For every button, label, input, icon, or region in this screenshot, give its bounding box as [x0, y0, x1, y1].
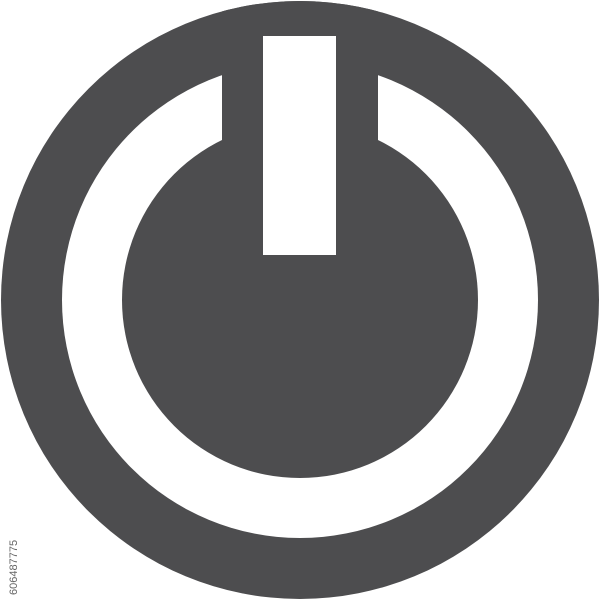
white ring	[62, 62, 538, 538]
white power bar	[263, 36, 336, 255]
stock id text: 606487775	[8, 540, 20, 595]
inner dark disk	[122, 122, 478, 478]
ring gap at top	[222, 1, 378, 140]
